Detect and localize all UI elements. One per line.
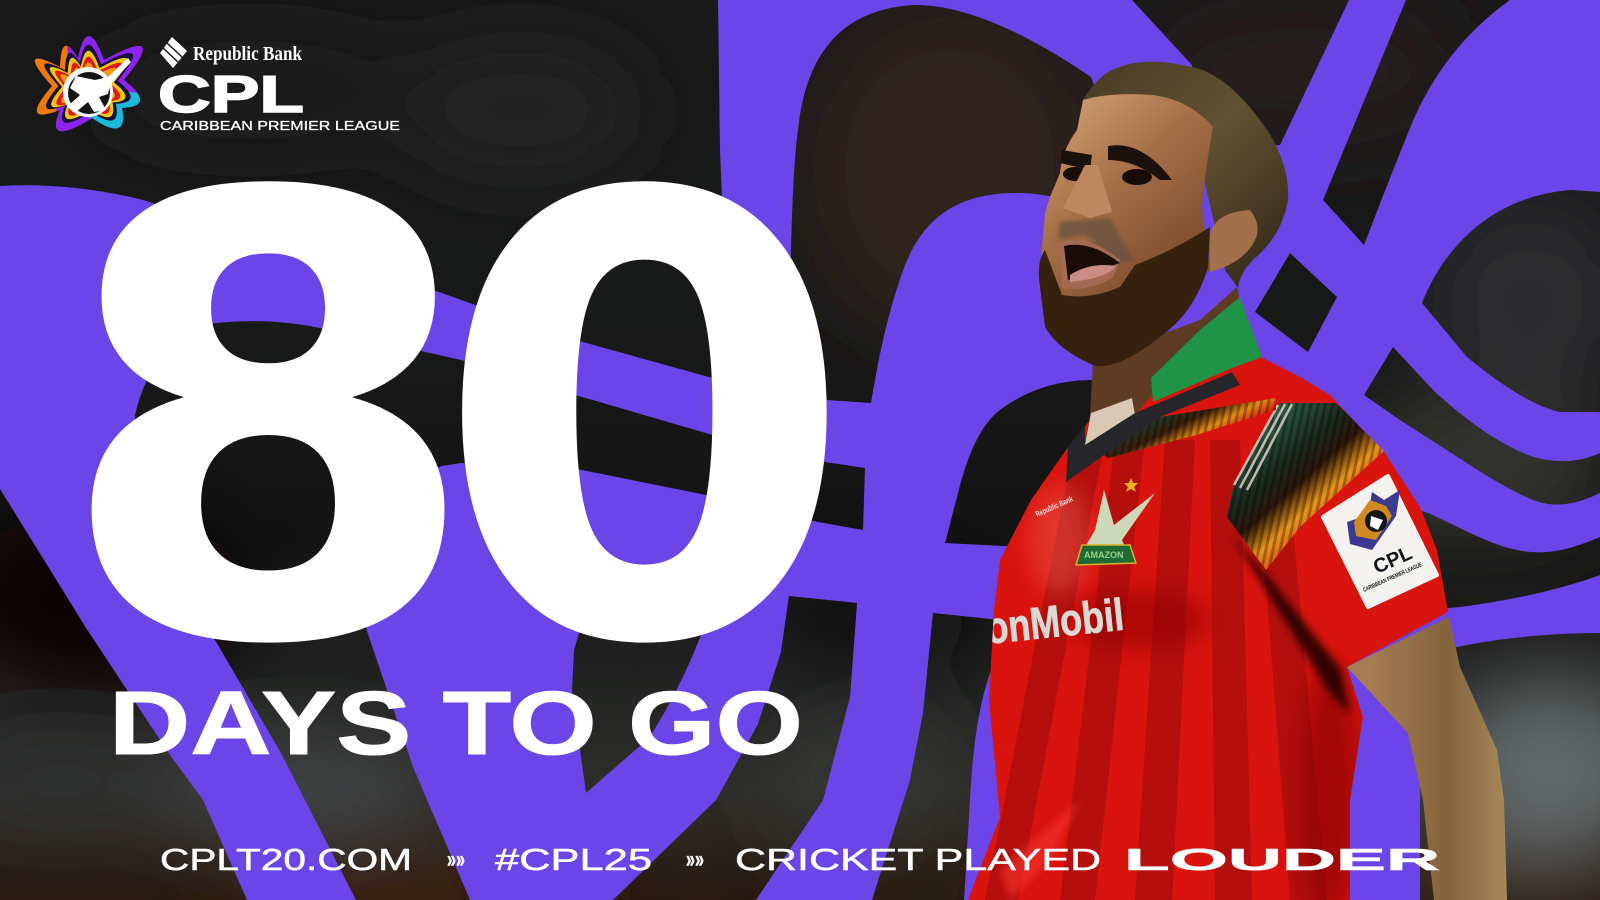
logo group <box>34 36 400 132</box>
chest yoke pattern <box>1104 398 1276 458</box>
footer strip <box>160 842 1440 877</box>
eyebrows and eyes <box>1060 145 1172 185</box>
days to go heading: DAYS TO GO <box>109 674 803 774</box>
neck skin in collar <box>1085 398 1135 445</box>
team crest <box>1076 490 1155 565</box>
moustache shadow <box>1058 218 1135 262</box>
CPL wordmark: CPL <box>158 66 304 124</box>
hair <box>1083 62 1288 288</box>
jersey badge: CPL <box>1370 542 1416 579</box>
black collar <box>1066 372 1240 482</box>
league name: CARIBBEAN PREMIER LEAGUE <box>160 118 400 133</box>
footer strip: #CPL25 <box>495 842 652 877</box>
gold star <box>1124 478 1138 492</box>
footer strip: CRICKET PLAYED <box>735 842 1101 877</box>
team crest: AMAZON <box>1084 550 1124 560</box>
big countdown number: 8 <box>54 68 483 778</box>
footer strip: »» <box>447 846 465 873</box>
ear <box>1210 210 1258 272</box>
arm <box>1347 617 1507 900</box>
big countdown number <box>54 68 856 778</box>
Republic Bank text: Republic Bank <box>193 43 303 65</box>
neck <box>1085 287 1240 445</box>
footer strip: CPLT20.COM <box>160 842 412 877</box>
shirt republic bank mark: Republic Bank <box>1034 494 1075 519</box>
nose <box>1063 165 1112 218</box>
footer strip: »» <box>686 846 704 873</box>
jersey <box>960 350 1460 900</box>
sponsor text on shirt: xonMobil <box>964 589 1126 656</box>
footer strip: LOUDER <box>1124 842 1440 877</box>
jersey badge <box>1323 476 1437 607</box>
green collar <box>1151 297 1262 402</box>
shoulder yoke pattern <box>1227 403 1385 570</box>
jersey badge: CARIBBEAN PREMIER LEAGUE <box>1362 562 1423 594</box>
Republic Bank mark <box>160 37 187 68</box>
face <box>1040 94 1213 310</box>
CPL rainbow star logo <box>34 36 143 132</box>
mouth <box>1060 240 1120 289</box>
big countdown number: 0 <box>433 68 856 778</box>
beard <box>1039 227 1210 366</box>
player photo <box>960 62 1507 900</box>
